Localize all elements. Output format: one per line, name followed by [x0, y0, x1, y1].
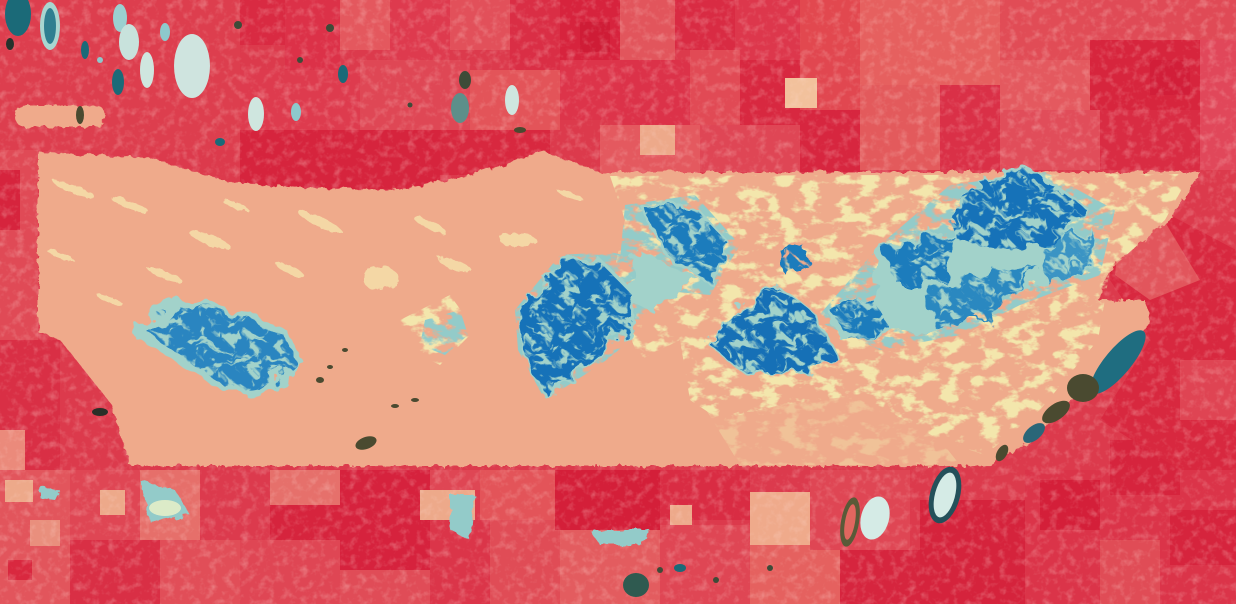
zone: solid light blue beneath forests	[132, 172, 1095, 398]
fields: western margin	[0, 150, 60, 470]
patch: eastern blue forest middle	[882, 235, 953, 283]
patch: blue forests	[150, 175, 1093, 394]
patch: central blue forest	[522, 262, 632, 394]
wetlands: southern pale blue	[40, 480, 650, 545]
patch: eastern blue forest core	[945, 175, 1082, 248]
patch: eastern blue forest strip	[925, 268, 1043, 333]
lakes: north-west wetlands	[5, 0, 526, 146]
patch: small blue outlier	[782, 250, 808, 273]
lakes: south-east chain	[837, 323, 1154, 548]
patch: eastern blue forest outlier	[1042, 232, 1093, 283]
zone: central bare ground	[15, 105, 1200, 466]
zone: light blue halo	[420, 172, 1115, 400]
patch: southern blue forest	[710, 285, 838, 372]
patch: western blue forest	[150, 305, 296, 392]
patch: northern blue forest	[645, 208, 730, 282]
zone: pale sparse vegetation	[400, 174, 1190, 455]
zone: pale streaks on western bare ground	[46, 179, 584, 308]
lakes: central chain	[316, 348, 419, 452]
fields: northern farmland blocks	[0, 0, 1236, 190]
patch: eastern blue forest south	[832, 297, 892, 340]
lakes: southern ponds	[92, 408, 773, 597]
wetland: southern pale core	[149, 500, 181, 516]
zone: pale mix in southern bare ground	[700, 395, 960, 465]
fields: southern farmland blocks	[0, 440, 1236, 604]
fields: eastern farmland blocks	[1100, 215, 1236, 470]
